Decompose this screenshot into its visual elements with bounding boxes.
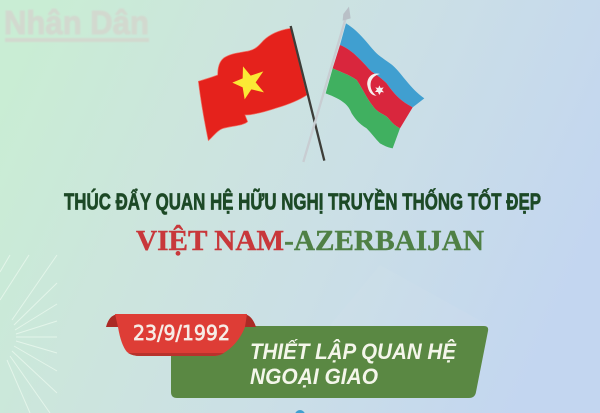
crossed flags: [198, 7, 424, 162]
red ribbon wings: [106, 314, 256, 327]
green banner: [171, 326, 488, 398]
watermark: Nhân Dân: Nhân Dân: [4, 4, 149, 41]
milestone text: NGOẠI GIAO: [250, 364, 378, 389]
title: Việt Nam-Azerbaijan: VIỆT NAM-AZERBAIJAN: [136, 224, 484, 257]
crescent and star: [367, 74, 380, 96]
panel: date milestone: [106, 314, 488, 398]
Vietnam pole: [291, 26, 324, 161]
icon: blue dot at edge: [295, 410, 305, 413]
Vietnam flag: [198, 26, 324, 161]
star: [232, 66, 264, 99]
date: 23/9/1992: [133, 321, 230, 345]
Azerbaijan pole: [303, 15, 347, 162]
red ribbon: [115, 314, 247, 356]
Azerbaijan flag: [303, 7, 424, 162]
milestone text: THIẾT LẬP QUAN HỆ: [250, 339, 457, 364]
